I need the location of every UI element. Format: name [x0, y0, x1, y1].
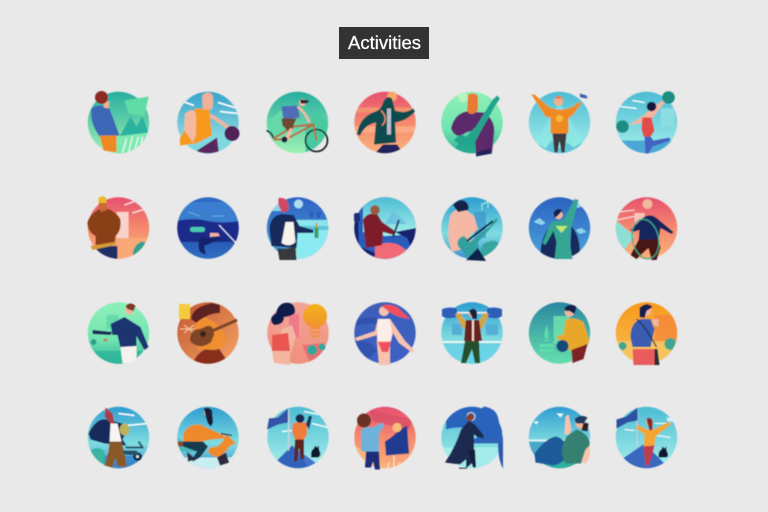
- icon: superhero: [529, 197, 590, 260]
- icon: man with hula hoop: [616, 197, 677, 261]
- icon: woman at bar with bottle: [267, 197, 330, 260]
- icon: hooded runner: [354, 92, 416, 156]
- icon: weightlifter with barbell: [441, 302, 503, 365]
- icon: man with raised arms and flag: [529, 92, 590, 154]
- icon: bowler: [528, 302, 590, 364]
- icon grid: [88, 91, 678, 474]
- icon: lumberjack: [88, 196, 150, 260]
- icon: reclining bearded man: [528, 407, 590, 470]
- icon: hiker with flag: [267, 407, 329, 474]
- icon: bearded bass player: [441, 92, 503, 156]
- icon: woman on summit with flag: [616, 407, 677, 472]
- icon: painter at easel: [354, 407, 416, 472]
- icon: man with scooter: [88, 407, 150, 470]
- icon: bald man with ball: [177, 92, 240, 156]
- icon: woman playing guitar: [177, 302, 239, 365]
- icon: scuba diver: [177, 197, 239, 260]
- icon: woman with lightbulb: [267, 302, 329, 365]
- icon: woman with phone and bag: [616, 302, 678, 365]
- title: Activities: [348, 33, 421, 53]
- icon: driver at wheel: [354, 197, 416, 260]
- icon: caped figure at piano: [441, 406, 503, 470]
- icon: bearded motorcycle rider: [177, 407, 239, 470]
- icon: man flying a kite: [88, 91, 152, 156]
- icon: woman with pom-poms: [616, 91, 678, 154]
- icon: electric guitarist: [441, 197, 503, 261]
- icon: cyclist: [266, 92, 332, 153]
- icon: golfer: [88, 302, 150, 365]
- icon: red-haired dancer: [354, 302, 416, 365]
- title: [339, 27, 429, 59]
